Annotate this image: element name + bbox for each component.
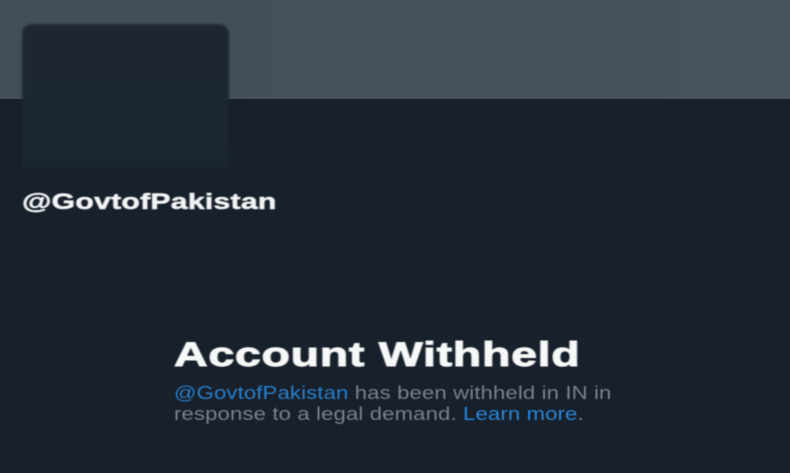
avatar placeholder <box>22 24 229 168</box>
notice heading: Account Withheld <box>174 336 580 374</box>
notice message: @GovtofPakistan has been withheld in IN in <box>174 383 611 403</box>
notice message <box>174 383 611 424</box>
profile banner <box>0 0 790 99</box>
lower profile panel <box>0 99 790 473</box>
notice message: response to a legal demand. Learn more. <box>174 404 584 424</box>
handle: @GovtofPakistan <box>22 189 277 214</box>
